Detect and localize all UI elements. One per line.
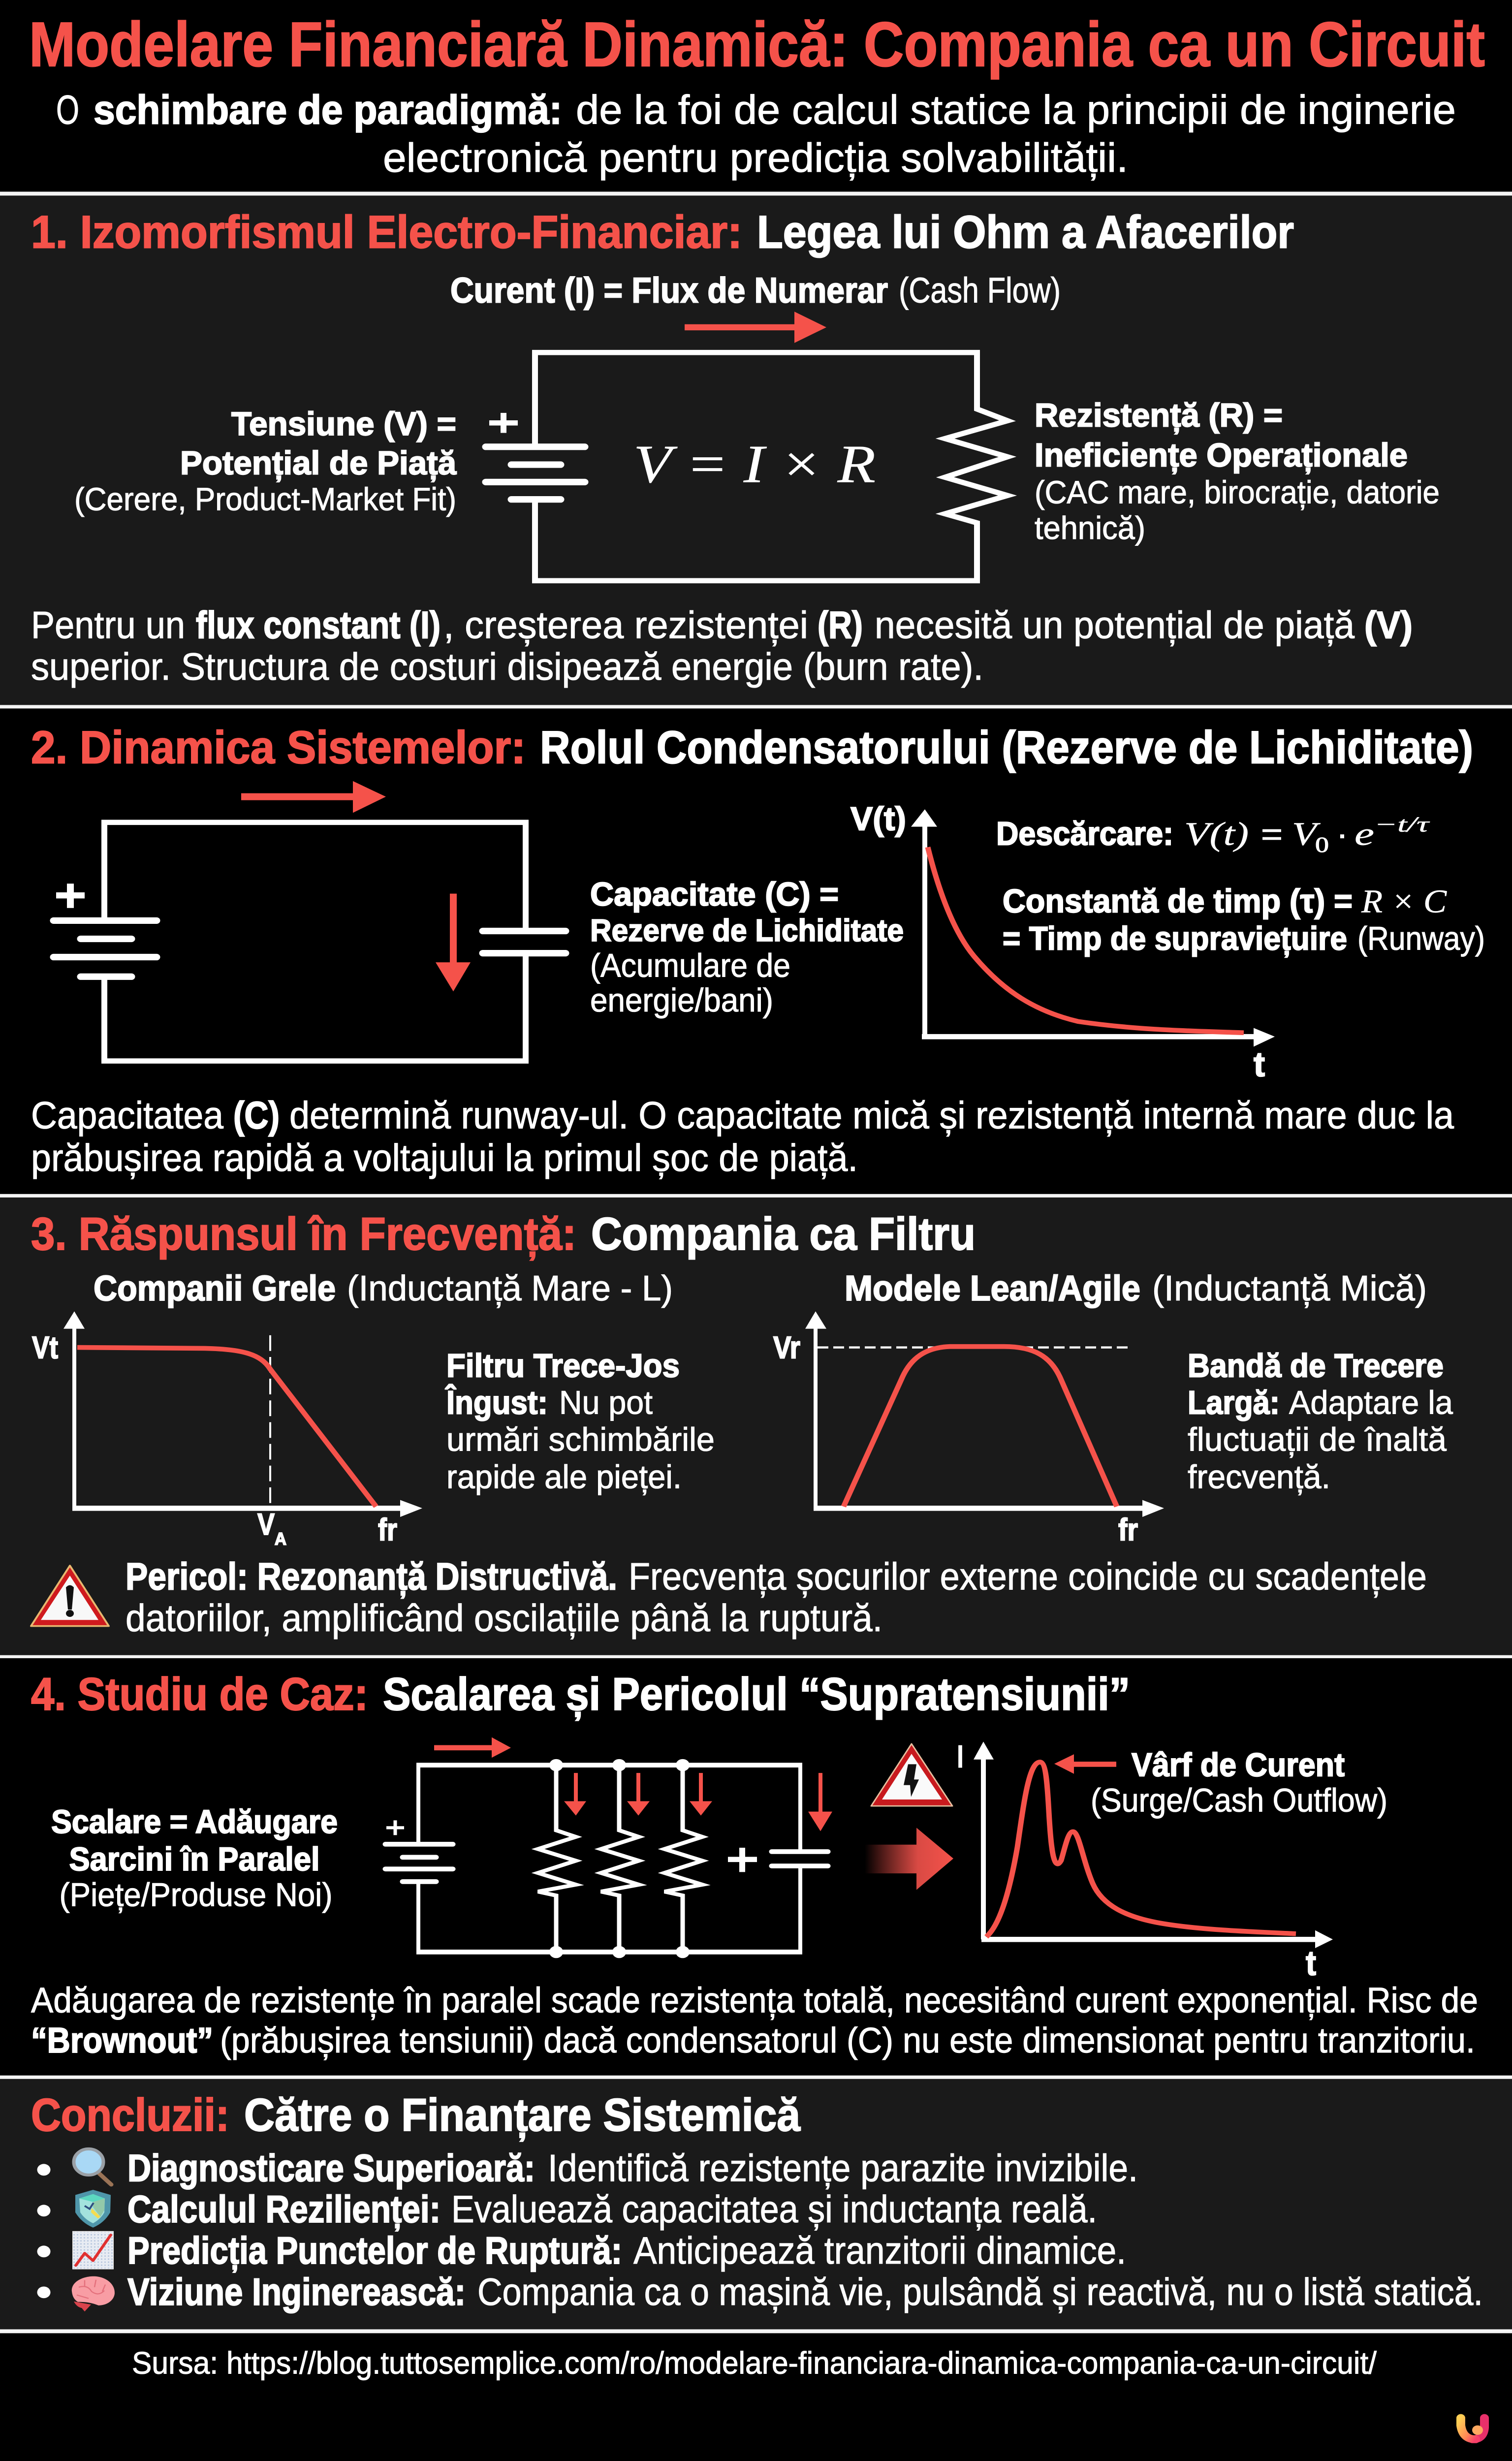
panel: conclusions <box>0 2076 1512 2333</box>
explanatory text: (C) <box>233 1094 280 1136</box>
low-pass note: Îngust: <box>445 1384 548 1421</box>
heading: Compania ca Filtru <box>591 1208 976 1260</box>
list item: resilience: Evaluează capacitatea și inductanța reală. <box>451 2188 1097 2231</box>
chart: band-pass <box>773 1311 1164 1547</box>
time constant: = Timp de supraviețuire <box>1003 920 1347 957</box>
list item: diagnostics: Diagnosticare Superioară: <box>127 2146 535 2189</box>
voltage label: Tensiune (V) = <box>231 406 456 442</box>
band-pass note: frecvență. <box>1188 1459 1330 1496</box>
heading: Legea lui Ohm a Afacerilor <box>757 206 1294 258</box>
peak label: (Surge/Cash Outflow) <box>1091 1782 1387 1819</box>
left chart title <box>94 1269 673 1308</box>
list item: diagnostics <box>37 2146 1138 2189</box>
discharge formula: e <box>1354 816 1374 852</box>
heading: 2. Dinamica Sistemelor: <box>31 722 526 773</box>
list item: prediction <box>37 2229 1126 2273</box>
low-pass note: urmări schimbările <box>446 1421 715 1458</box>
icon: warning triangle <box>31 1566 109 1626</box>
panel: section 2 capacitor <box>31 722 1485 1179</box>
explanatory text: “Brownout” <box>31 2020 213 2060</box>
right chart title: Modele Lean/Agile <box>845 1269 1140 1308</box>
heading <box>31 722 1473 773</box>
explanatory text: necesită un potențial de piață <box>875 603 1354 646</box>
discharge formula: = <box>1261 817 1283 852</box>
subtitle: schimbare de paradigmă: <box>94 87 562 132</box>
chart: low-pass filter: fr <box>378 1513 397 1547</box>
explanatory text: (V) <box>1364 603 1413 646</box>
chart: current surge: I <box>957 1739 963 1774</box>
capacitance label: Capacitate (C) = <box>590 876 839 913</box>
list item: resilience: Calculul Rezilienței: <box>127 2188 441 2232</box>
scaling label: Scalare = Adăugare <box>51 1803 338 1840</box>
peak label <box>1091 1746 1387 1819</box>
time constant <box>1003 883 1485 957</box>
discharge formula: −t/τ <box>1374 812 1430 836</box>
right chart title: (Inductanță Mică) <box>1152 1269 1427 1308</box>
current label: (Cash Flow) <box>899 271 1061 311</box>
formula: V = I × R <box>633 434 876 494</box>
heading <box>31 206 1294 258</box>
resistance label: tehnică) <box>1035 510 1145 546</box>
explanatory text: flux constant (I) <box>196 603 441 646</box>
arrow: current direction <box>685 312 826 343</box>
panel: section 3 frequency response <box>0 1194 1512 1658</box>
list item: resilience <box>37 2188 1097 2232</box>
voltage label: Potențial de Piață <box>180 444 457 482</box>
chart: voltage discharge <box>850 801 1275 1084</box>
explanatory text: prăbușirea rapidă a voltajului la primul șoc de piață. <box>31 1136 858 1179</box>
voltage label <box>74 406 457 517</box>
band-pass note <box>1188 1348 1453 1496</box>
heading: 1. Izomorfismul Electro-Financiar: <box>31 206 742 258</box>
subtitle: O <box>56 87 79 132</box>
subtitle: electronică pentru predicția solvabilității. <box>383 135 1128 180</box>
band-pass note: fluctuații de înaltă <box>1188 1421 1447 1458</box>
discharge formula: V <box>1292 816 1321 852</box>
arrow: peak pointer <box>1054 1754 1116 1774</box>
icon: high voltage triangle <box>871 1744 952 1806</box>
circuit diagram <box>54 822 566 1061</box>
icon: logo <box>1461 2418 1484 2439</box>
arrow: current direction <box>241 781 386 813</box>
explanatory text <box>31 1094 1454 1179</box>
chart: voltage discharge: t <box>1254 1045 1265 1084</box>
band-pass note: Bandă de Trecere <box>1188 1348 1444 1385</box>
chart: low-pass filter: Vt <box>32 1330 58 1365</box>
heading: 4. Studiu de Caz: <box>31 1669 368 1720</box>
arrows: branch currents <box>564 1773 832 1831</box>
capacitance label: Rezerve de Lichiditate <box>590 913 904 948</box>
voltage label: (Cerere, Product-Market Fit) <box>74 481 456 517</box>
band-pass note: Adaptare la <box>1289 1385 1453 1421</box>
subtitle <box>56 87 1456 180</box>
low-pass note <box>445 1348 715 1496</box>
capacitance label <box>590 876 904 1019</box>
resistance label: (CAC mare, birocrație, datorie <box>1035 474 1440 510</box>
explanatory text: , creșterea rezistenței <box>443 603 808 646</box>
resistance label: Rezistență (R) = <box>1035 397 1283 434</box>
left chart title: Companii Grele <box>94 1269 336 1308</box>
resistors in parallel <box>538 1765 702 1952</box>
discharge formula: 0 <box>1315 832 1329 857</box>
explanatory text: (R) <box>818 603 863 646</box>
list item: engineering vision <box>37 2270 1483 2313</box>
peak label: Vârf de Curent <box>1132 1746 1345 1783</box>
time constant: Constantă de timp (τ) = <box>1003 883 1353 920</box>
resistance label <box>1035 397 1440 546</box>
band-pass note: Largă: <box>1188 1385 1280 1421</box>
scaling label: (Piețe/Produse Noi) <box>59 1876 333 1913</box>
list item: engineering vision: Viziune Inginerească: <box>127 2270 466 2313</box>
panel: section 4 case study <box>31 1669 1478 2060</box>
scaling label <box>51 1803 338 1913</box>
chart: band-pass: Vr <box>773 1330 800 1365</box>
arrow: discharge current <box>436 894 471 991</box>
heading <box>31 1208 976 1261</box>
arrow: current direction <box>434 1737 511 1758</box>
discharge formula: Descărcare: <box>996 816 1173 852</box>
discharge formula <box>996 812 1430 857</box>
discharge formula: V(t) <box>1184 816 1249 852</box>
time constant: R × C <box>1361 883 1447 920</box>
chart: band-pass: fr <box>1118 1513 1138 1547</box>
capacitance label: (Acumulare de <box>590 947 790 984</box>
arrow: gradient transition <box>865 1828 953 1890</box>
explanatory text: superior. Structura de costuri disipează energie (burn rate). <box>31 645 983 688</box>
circuit diagram <box>486 352 1008 581</box>
list item: diagnostics: Identifică rezistențe parazite invizibile. <box>548 2146 1138 2189</box>
capacitance label: energie/bani) <box>590 982 773 1019</box>
discharge formula: · <box>1336 817 1348 852</box>
chart: current surge: t <box>1306 1944 1316 1983</box>
chart: low-pass filter: A <box>275 1530 286 1548</box>
heading: Către o Finanțare Sistemică <box>244 2089 801 2142</box>
scaling label: Sarcini în Paralel <box>69 1841 320 1878</box>
explanatory text: Capacitatea <box>31 1094 223 1136</box>
right chart title <box>845 1269 1427 1308</box>
explanatory text: Pentru un <box>31 603 185 646</box>
explanatory text <box>31 603 1413 688</box>
resistance label: Ineficiențe Operaționale <box>1035 437 1408 474</box>
list item: prediction: Predicția Punctelor de Ruptură: <box>127 2229 622 2273</box>
low-pass note: rapide ale pieței. <box>446 1459 682 1496</box>
heading: 3. Răspunsul în Frecvență: <box>31 1208 576 1261</box>
panel: section 1 Ohm's law <box>0 191 1512 708</box>
heading: Scalarea și Pericolul “Supratensiunii” <box>383 1669 1130 1721</box>
low-pass note: Filtru Trece-Jos <box>446 1348 680 1385</box>
heading <box>31 1669 1130 1721</box>
heading: Concluzii: <box>31 2089 229 2141</box>
left chart title: (Inductanță Mare - L) <box>347 1269 673 1308</box>
current label: Curent (I) = Flux de Numerar <box>450 271 888 311</box>
explanatory text <box>31 1981 1478 2060</box>
chart: low-pass filter: V <box>257 1508 275 1541</box>
list item: prediction: Anticipează tranzitorii dinamice. <box>633 2229 1126 2272</box>
chart: low-pass filter <box>32 1311 422 1548</box>
chart: voltage discharge: V(t) <box>850 801 906 838</box>
danger callout: datoriilor, amplificând oscilațiile până la ruptură. <box>126 1597 882 1640</box>
danger callout: Pericol: Rezonanță Distructivă. <box>126 1555 617 1599</box>
header <box>29 9 1485 180</box>
heading <box>31 2089 801 2142</box>
chart: current surge <box>957 1739 1333 1983</box>
parallel circuit diagram <box>385 1759 828 1958</box>
low-pass note: Nu pot <box>559 1385 653 1421</box>
danger callout <box>126 1555 1427 1640</box>
